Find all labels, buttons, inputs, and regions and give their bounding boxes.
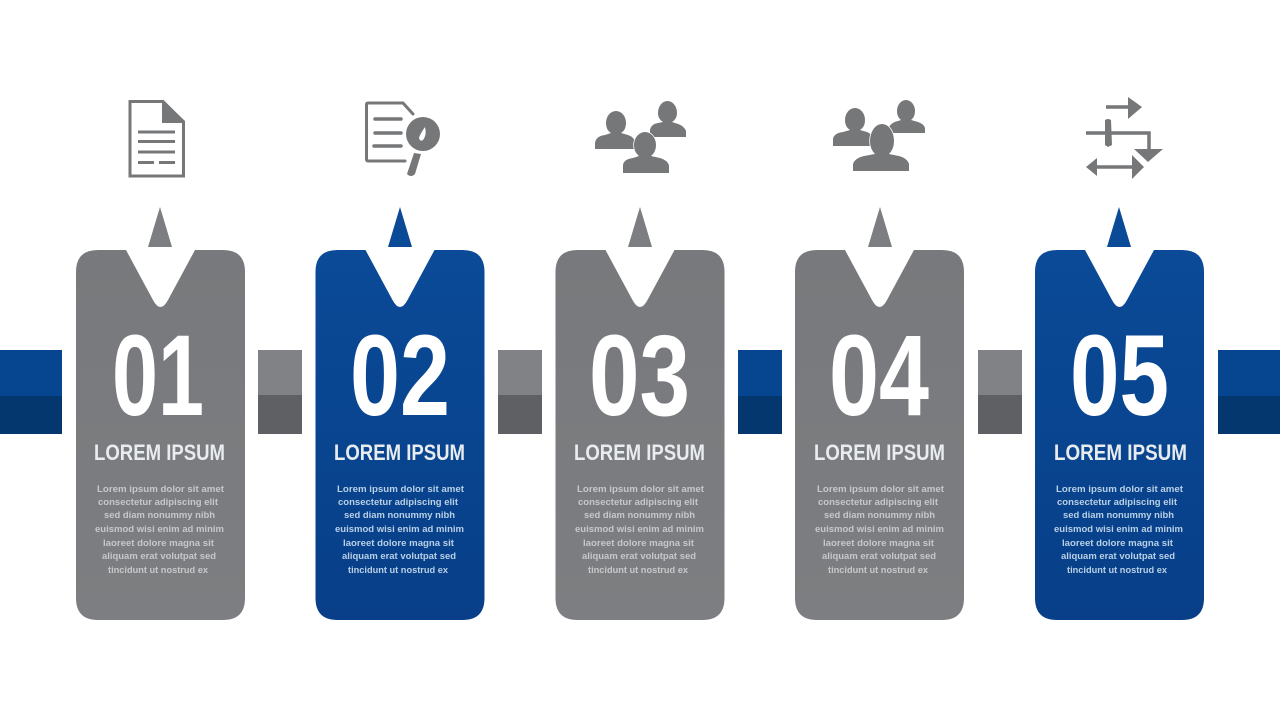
body text 03: laoreet dolore magna sit (583, 538, 695, 549)
body text 01: consectetur adipiscing elit (98, 497, 219, 508)
body text 04: laoreet dolore magna sit (823, 538, 935, 549)
person back left (833, 108, 874, 146)
card shape 01 (76, 250, 245, 620)
pointer 04 (868, 207, 892, 247)
body text 03 (575, 484, 705, 576)
body text 02: Lorem ipsum dolor sit amet (337, 484, 465, 495)
body text 05: consectetur adipiscing elit (1057, 497, 1178, 508)
body text 02 (335, 484, 465, 576)
body text 04: aliquam erat volutpat sed (822, 551, 936, 562)
connector band: 3 to 4 (738, 350, 782, 434)
body text 01: laoreet dolore magna sit (103, 538, 215, 549)
connector band: left edge (0, 350, 62, 434)
body text 05: euismod wisi enim ad minim (1054, 524, 1183, 535)
body text 02: consectetur adipiscing elit (338, 497, 459, 508)
body text 01: Lorem ipsum dolor sit amet (97, 484, 225, 495)
card shape 03 (556, 250, 724, 620)
body text 03: aliquam erat volutpat sed (582, 551, 696, 562)
body text 03: Lorem ipsum dolor sit amet (577, 484, 705, 495)
number 02: 02 (350, 312, 450, 440)
body text 05: sed diam nonummy nibh (1063, 510, 1174, 521)
panel: step 03 (556, 207, 724, 620)
body text 05: tincidunt ut nostrud ex (1067, 565, 1168, 576)
person front (623, 132, 669, 173)
body text 05 (1054, 484, 1184, 576)
body text 01: tincidunt ut nostrud ex (108, 565, 209, 576)
body text 05: Lorem ipsum dolor sit amet (1056, 484, 1184, 495)
person back left (595, 111, 636, 149)
body text 02: sed diam nonummy nibh (344, 510, 455, 521)
person back right (650, 101, 686, 137)
icon: document with magnifier (366, 103, 440, 176)
body text 03: euismod wisi enim ad minim (575, 524, 704, 535)
person front (853, 124, 909, 171)
panel: step 01 (76, 207, 245, 620)
pointer 01 (148, 207, 172, 247)
number 05: 05 (1070, 312, 1169, 440)
body text 03: consectetur adipiscing elit (578, 497, 699, 508)
number 03: 03 (589, 312, 690, 440)
body text 05: aliquam erat volutpat sed (1061, 551, 1175, 562)
heading 04: LOREM IPSUM (814, 440, 945, 465)
person back right (889, 100, 925, 133)
pointer 02 (388, 207, 412, 247)
body text 02: laoreet dolore magna sit (343, 538, 455, 549)
heading 01: LOREM IPSUM (94, 440, 225, 465)
body text 01 (95, 484, 225, 576)
pointer 05 (1107, 207, 1131, 247)
body text 04: Lorem ipsum dolor sit amet (817, 484, 945, 495)
heading 03: LOREM IPSUM (574, 440, 705, 465)
pointer 03 (628, 207, 652, 247)
body text 03: tincidunt ut nostrud ex (588, 565, 689, 576)
body text 02: aliquam erat volutpat sed (342, 551, 456, 562)
card shape 02 (316, 250, 484, 620)
heading 02: LOREM IPSUM (334, 440, 465, 465)
icon: process arrows (1086, 97, 1163, 179)
body text 04: consectetur adipiscing elit (818, 497, 939, 508)
body text 01: euismod wisi enim ad minim (95, 524, 224, 535)
connector band: 2 to 3 (498, 350, 542, 434)
body text 04 (815, 484, 945, 576)
card shape 04 (795, 250, 964, 620)
panel: step 02 (316, 207, 484, 620)
connector band: 1 to 2 (258, 350, 302, 434)
body text 05: laoreet dolore magna sit (1062, 538, 1174, 549)
body text 01: sed diam nonummy nibh (104, 510, 215, 521)
number 04: 04 (829, 312, 929, 440)
icon: document (130, 101, 185, 176)
connector band: 4 to 5 (978, 350, 1022, 434)
card shape 05 (1035, 250, 1204, 620)
icon: three people large front (833, 100, 925, 171)
body text 03: sed diam nonummy nibh (584, 510, 695, 521)
heading 05: LOREM IPSUM (1054, 440, 1187, 465)
panel: step 04 (795, 207, 964, 620)
icon: three people (595, 101, 686, 173)
connector band: right edge (1218, 350, 1280, 434)
body text 02: tincidunt ut nostrud ex (348, 565, 449, 576)
body text 02: euismod wisi enim ad minim (335, 524, 464, 535)
panel: step 05 (1035, 207, 1204, 620)
body text 04: sed diam nonummy nibh (824, 510, 935, 521)
body text 04: euismod wisi enim ad minim (815, 524, 944, 535)
body text 01: aliquam erat volutpat sed (102, 551, 216, 562)
number 01: 01 (112, 312, 204, 440)
body text 04: tincidunt ut nostrud ex (828, 565, 929, 576)
